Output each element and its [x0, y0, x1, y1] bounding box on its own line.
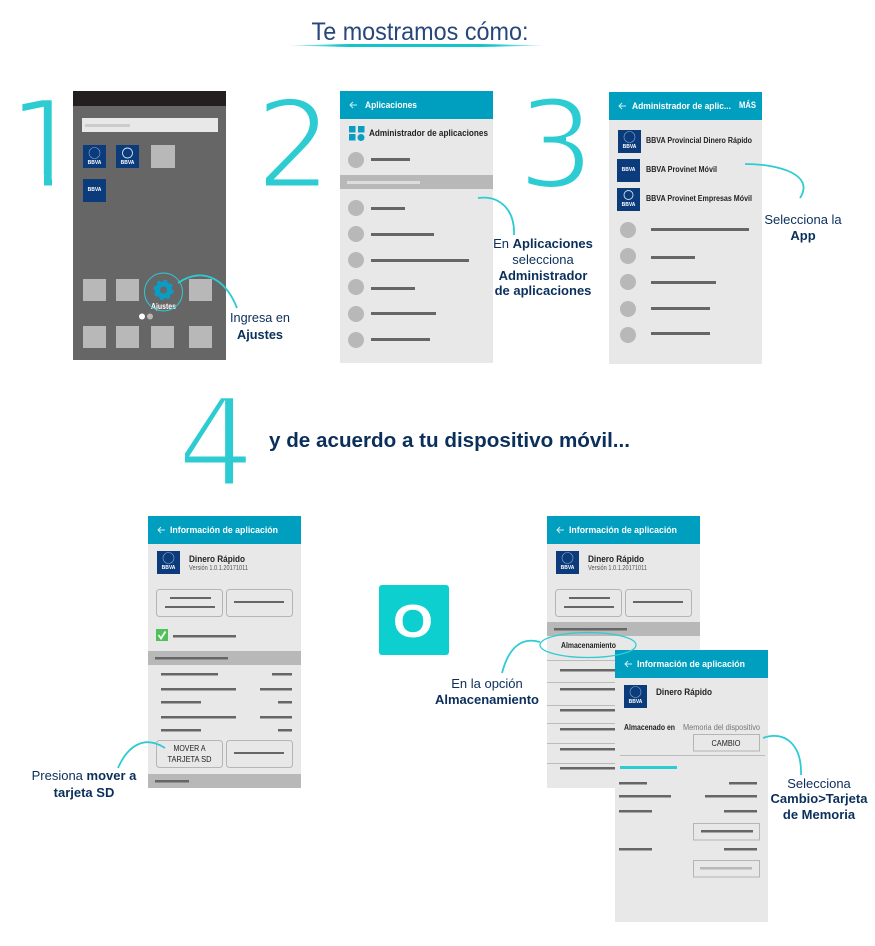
icon: BBVA app one — [83, 145, 106, 168]
text: Dinero Rápido: Dinero Rápido — [189, 554, 245, 565]
icon: BBVA logo: BBVA — [561, 565, 575, 571]
text: Memoria del dispositivo: Memoria del dispositivo — [683, 722, 760, 732]
panel: option B app info — [547, 516, 700, 788]
text: Dinero Rápido: Dinero Rápido — [588, 554, 644, 565]
button: Mover a tarjeta SD — [156, 740, 222, 768]
button: Mover a tarjeta SD: TARJETA SD — [168, 755, 212, 764]
panel: step 3 application manager — [609, 92, 762, 364]
text: Ingresa en Ajustes: Ingresa en — [230, 310, 290, 325]
title: Te mostramos cómo: — [312, 18, 528, 46]
icon: BBVA Provinet Empresas — [617, 188, 640, 211]
panel: step 2 applications list — [340, 91, 493, 363]
icon: BBVA Provinet Empresas: BBVA — [622, 202, 636, 208]
icon: BBVA app three: BBVA — [88, 187, 102, 193]
text: En la opción Almacenamiento: Almacenamiento — [435, 692, 539, 707]
step number 3: 3 — [517, 74, 595, 216]
button: Cambio — [694, 734, 760, 751]
icon: BBVA Dinero Rápido: BBVA — [623, 144, 637, 150]
heading: Administrador de aplic...: Administrador de aplic... — [632, 101, 731, 112]
text: Presiona mover a tarjeta SD: Presiona mover a — [32, 768, 136, 783]
arrow: Cambio callout curve — [763, 736, 801, 775]
arrow: step 3 callout curve — [745, 164, 804, 198]
icon: BBVA logo — [157, 551, 180, 574]
button pair — [156, 590, 292, 616]
text: version: Versión 1.0.1.20171011 — [588, 565, 647, 572]
text: En Aplicaciones selecciona Administrador de aplicaciones: selecciona — [512, 252, 574, 267]
text: Ingresa en Ajustes: Ajustes — [237, 327, 283, 342]
icon: BBVA app two — [116, 145, 139, 168]
step number 4: 4 — [177, 372, 255, 514]
text: Selecciona la App: App — [790, 228, 816, 243]
icon: back arrow — [625, 661, 632, 667]
icon: letter O badge — [379, 585, 449, 655]
text: BBVA Provinet Móvil: BBVA Provinet Móvil — [646, 165, 717, 174]
icon: BBVA logo: BBVA — [629, 699, 643, 705]
icon: BBVA app one: BBVA — [88, 160, 102, 166]
button: Cambio: CAMBIO — [712, 739, 740, 748]
text: BBVA Provinet Empresas Móvil: BBVA Provinet Empresas Móvil — [646, 194, 752, 203]
arrow: Almacenamiento callout curve — [502, 641, 540, 673]
icon: back arrow — [158, 527, 165, 533]
icon: back arrow — [350, 102, 357, 108]
icon: BBVA Dinero Rápido — [618, 130, 641, 153]
text: Dinero Rápido: Dinero Rápido — [656, 687, 712, 698]
text: Administrador de aplicaciones: Administrador de aplicaciones — [369, 128, 488, 139]
step number 2: 2 — [255, 74, 333, 216]
text: En la opción Almacenamiento: En la opción — [451, 676, 523, 691]
heading: y de acuerdo a tu dispositivo móvil: y de acuerdo a tu dispositivo móvil... — [269, 430, 630, 452]
text: BBVA Provincial Dinero Rápido: BBVA Provincial Dinero Rápido — [646, 136, 752, 145]
icon: BBVA logo: BBVA — [162, 565, 176, 571]
arrow: step 1 callout curve — [178, 275, 237, 308]
callout: Almacenamiento highlight ellipse — [540, 632, 636, 658]
panel: step 1 home screen — [73, 91, 226, 360]
text: Selecciona Cambio Tarjeta de Memoria: de Memoria — [783, 807, 856, 822]
text: Almacenamiento option: Almacenamiento — [561, 641, 616, 650]
text: En Aplicaciones selecciona Administrador de aplicaciones: En Aplicaciones — [493, 236, 593, 251]
text: En Aplicaciones selecciona Administrador de aplicaciones: de aplicaciones — [495, 283, 591, 298]
icon: BBVA logo — [556, 551, 579, 574]
icon: BBVA app three — [83, 179, 106, 202]
panel: option B storage screen — [615, 650, 768, 922]
icon: BBVA Provinet Móvil: BBVA — [622, 167, 636, 173]
icon: BBVA app two: BBVA — [121, 160, 135, 166]
heading: Información de aplicación: Información de aplicación — [637, 659, 745, 670]
button pair — [556, 590, 692, 616]
step number 1: 1 — [7, 74, 85, 216]
icon: BBVA Provinet Móvil — [617, 159, 640, 182]
icon: back arrow — [619, 103, 626, 109]
button: Mover a tarjeta SD: MOVER A — [174, 744, 206, 753]
label: MÁS: MÁS — [739, 100, 756, 111]
arrow: step 2 callout curve — [478, 198, 514, 235]
icon: letter O badge: O — [393, 595, 433, 647]
icon: BBVA logo — [624, 685, 647, 708]
icon: settings gear — [154, 281, 172, 299]
text: Presiona mover a tarjeta SD: tarjeta SD — [54, 785, 114, 800]
heading: Información de aplicación: Información de aplicación — [569, 525, 677, 536]
icon: back arrow — [557, 527, 564, 533]
text: version: Versión 1.0.1.20171011 — [189, 565, 248, 572]
icon: green check — [156, 629, 168, 641]
heading: Aplicaciones: Aplicaciones — [365, 100, 417, 111]
heading: Información de aplicación: Información de aplicación — [170, 525, 278, 536]
label: Ajustes: Ajustes — [151, 301, 176, 311]
text: Selecciona Cambio Tarjeta de Memoria: Cambio>Tarjeta — [771, 791, 868, 806]
panel: option A app info — [148, 516, 301, 788]
arrow: option A callout curve — [118, 742, 165, 768]
icon: app manager grid — [349, 126, 364, 141]
text: Almacenado en: Almacenado en — [624, 722, 675, 732]
text: En Aplicaciones selecciona Administrador de aplicaciones: Administrador — [499, 268, 587, 283]
text: Selecciona Cambio Tarjeta de Memoria: Selecciona — [787, 776, 852, 791]
text: Selecciona la App: Selecciona la — [764, 212, 842, 227]
